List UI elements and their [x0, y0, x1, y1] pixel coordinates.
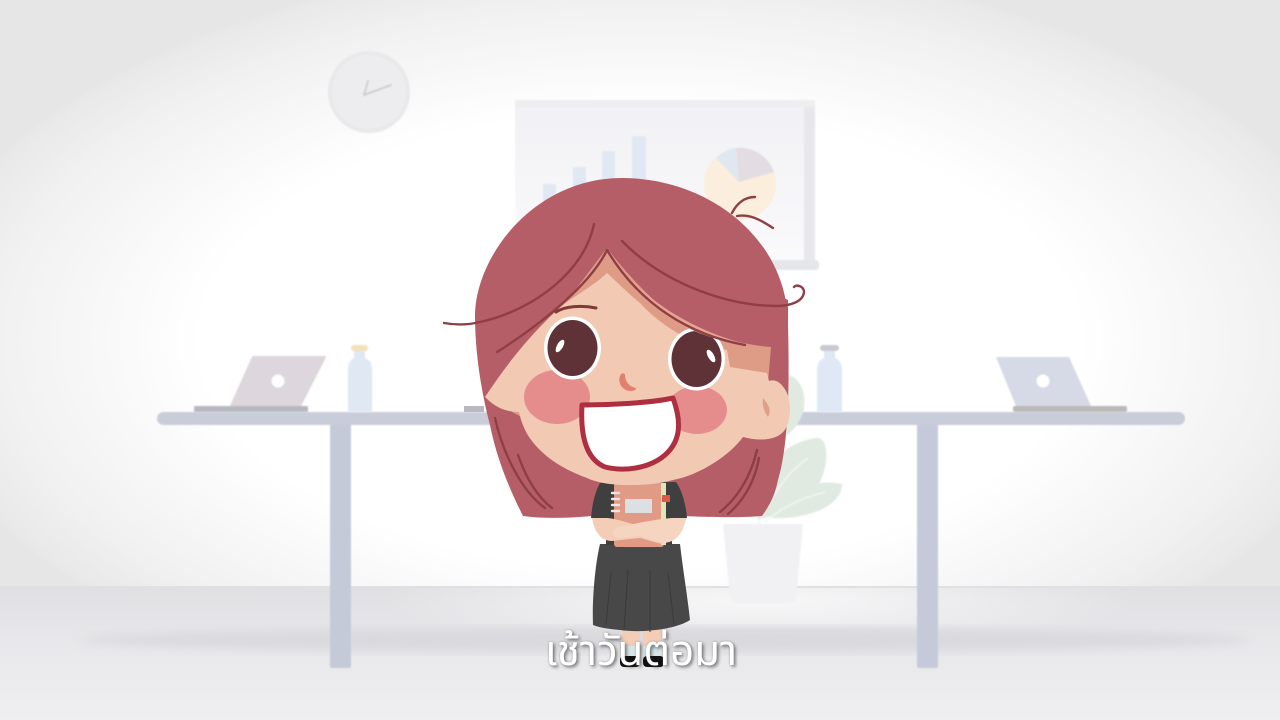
fringe over right eye	[607, 235, 788, 347]
notebook	[612, 483, 670, 547]
right eye	[668, 328, 725, 390]
crossed arms	[592, 518, 686, 543]
hair	[475, 178, 789, 518]
caption: เช้าวันต่อมา	[545, 627, 737, 674]
fringe skin strip	[617, 263, 745, 344]
hair strands	[444, 197, 804, 514]
bar chart	[543, 136, 646, 224]
floor	[0, 586, 1280, 720]
left bottle	[348, 345, 372, 412]
wall clock	[328, 51, 410, 133]
left eye	[544, 316, 601, 380]
blouse	[591, 482, 687, 545]
mouth	[582, 398, 679, 469]
left eyebrow	[556, 306, 596, 312]
pie chart	[704, 148, 776, 220]
left cheek	[524, 370, 590, 424]
presentation board	[515, 100, 819, 270]
right laptop	[996, 357, 1127, 412]
face shadow	[485, 248, 771, 460]
table	[157, 412, 1185, 668]
shoes and legs	[620, 628, 664, 667]
floor shadow	[80, 627, 1250, 653]
middle laptop base	[464, 406, 484, 412]
ear detail	[763, 398, 770, 417]
nose	[619, 373, 636, 391]
right cheek	[667, 386, 727, 434]
girl character	[444, 178, 804, 667]
potted plant	[723, 375, 842, 603]
left laptop	[194, 357, 325, 412]
skirt	[593, 544, 690, 632]
right bottle	[817, 345, 842, 412]
face	[485, 273, 790, 485]
